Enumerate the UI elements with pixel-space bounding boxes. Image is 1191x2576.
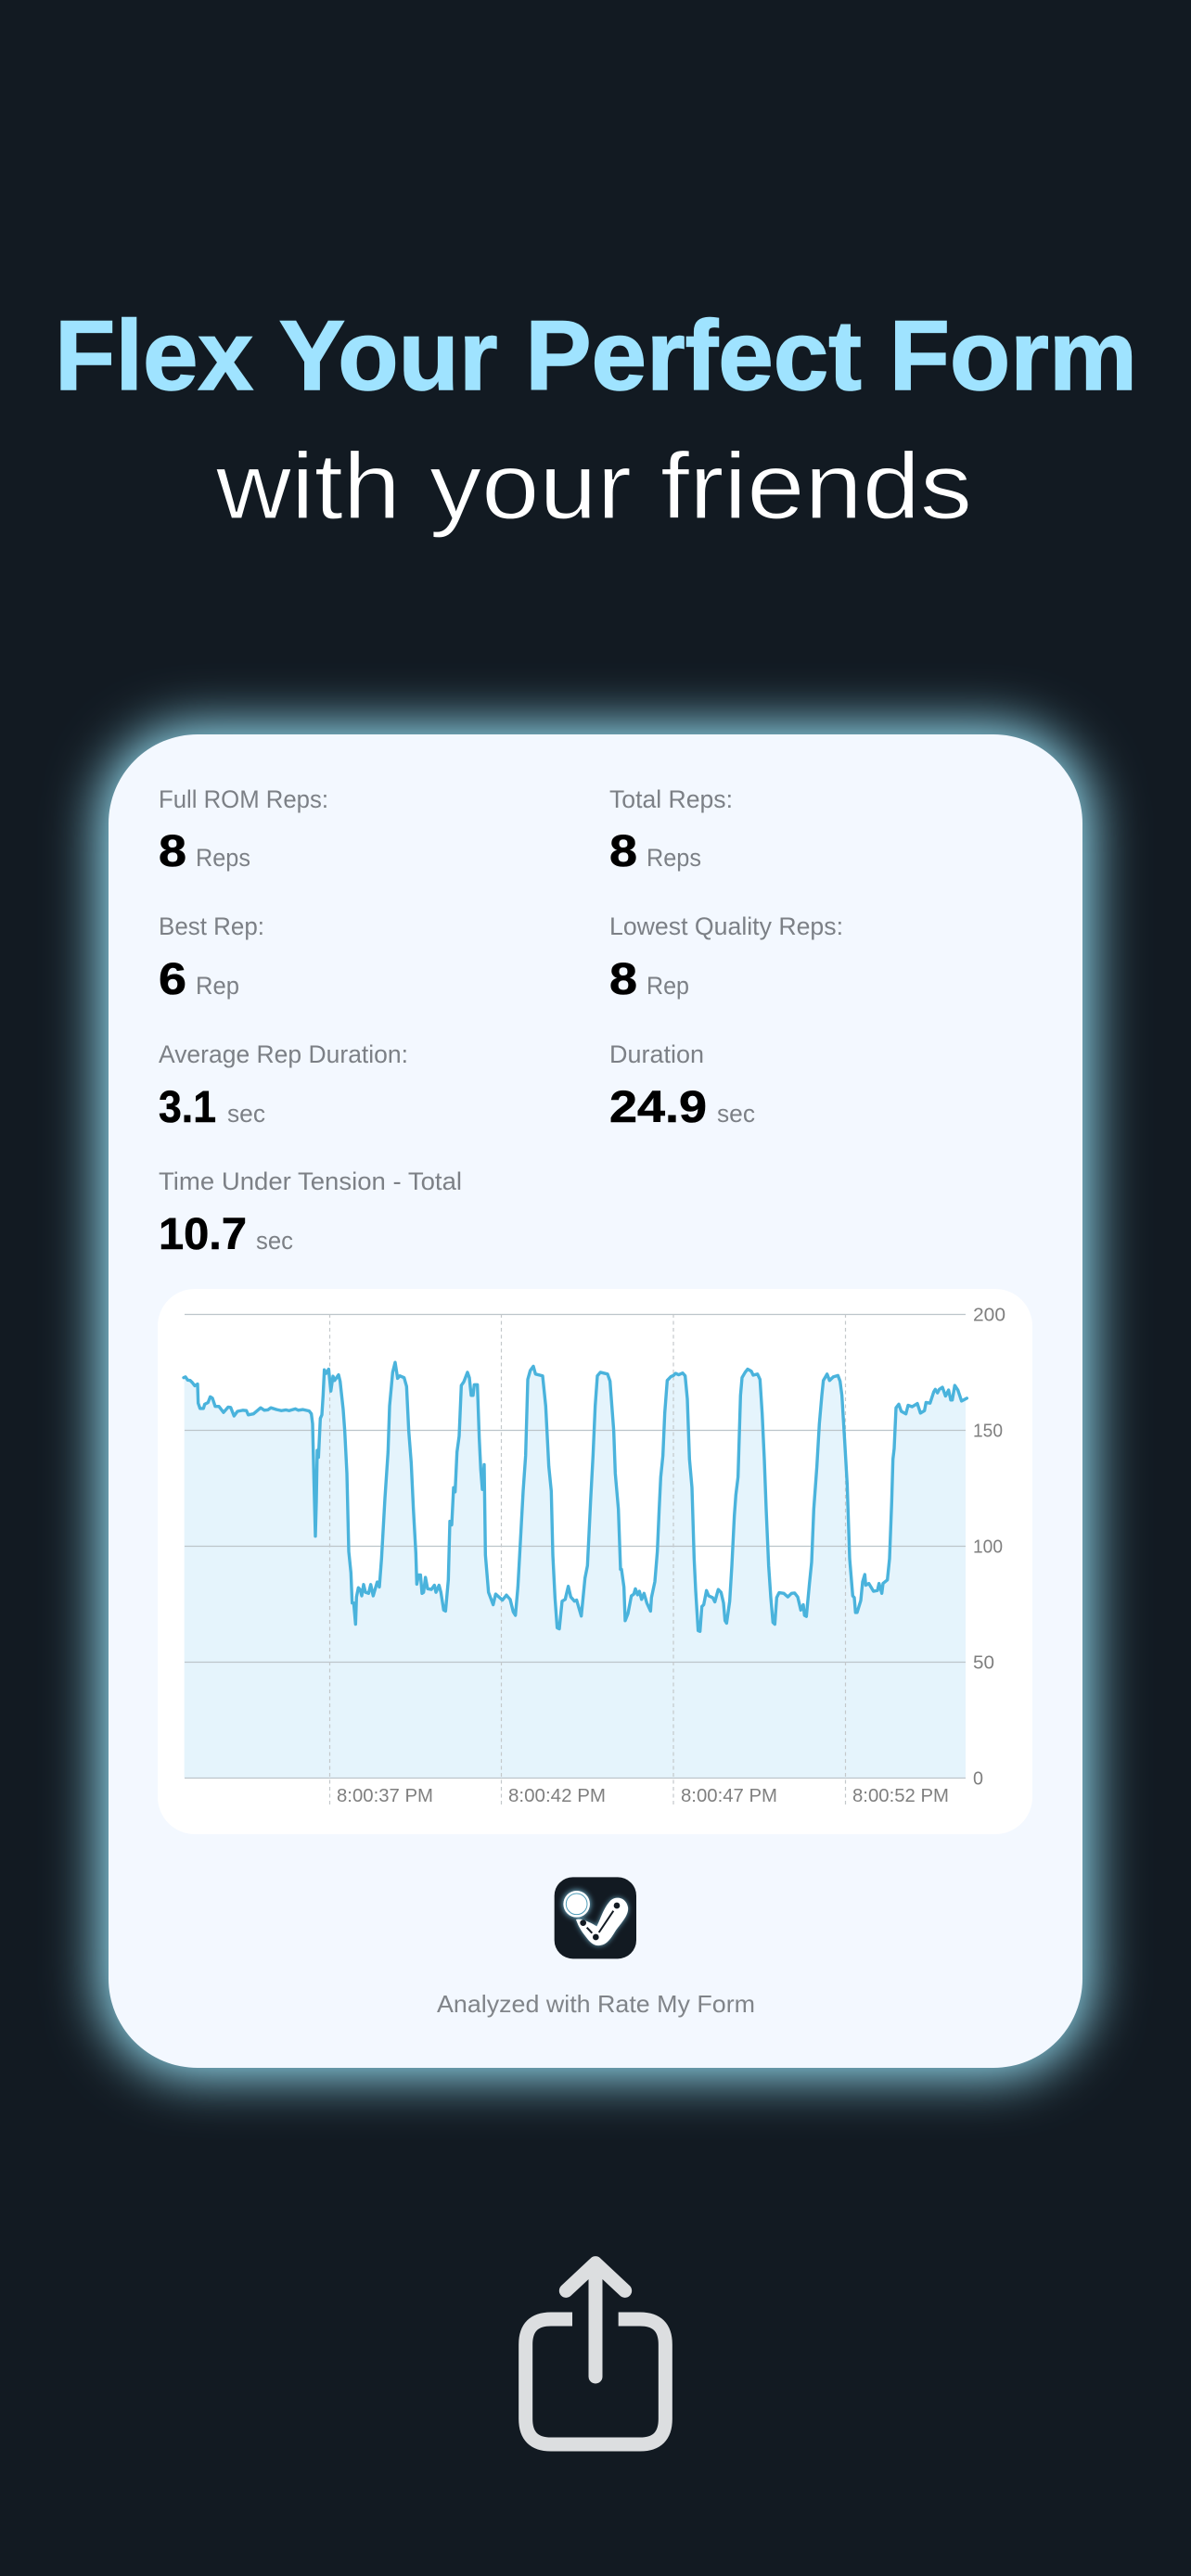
subtitle: with your friends: with your friends <box>215 435 972 539</box>
stat: Duration: Duration <box>609 1040 704 1068</box>
stat: Total Reps <box>609 785 733 876</box>
stat: Duration <box>609 1040 755 1132</box>
stat: Full ROM Reps <box>159 785 328 876</box>
stat: Total Reps: 8 <box>609 827 637 876</box>
stat: Full ROM Reps: 8 <box>159 827 186 876</box>
x axis time labels: 8:00:42 PM <box>508 1786 606 1806</box>
stat: Average Rep Duration: Average Rep Duration: <box>159 1040 408 1068</box>
stat: Full ROM Reps: Full ROM Reps: <box>159 785 328 813</box>
stat: Average Rep Duration: 3.1 <box>159 1083 216 1132</box>
glow behind card <box>101 727 1090 2075</box>
stat: Lowest Quality Reps: Rep <box>647 972 689 1000</box>
stat: Average Rep Duration <box>159 1040 408 1132</box>
x axis time labels: 8:00:37 PM <box>337 1786 433 1806</box>
stat: Best Rep: 6 <box>159 955 186 1004</box>
stat: Lowest Quality Reps: Lowest Quality Reps: <box>609 912 843 940</box>
y axis labels: 0 <box>973 1769 983 1790</box>
stat: Lowest Quality Reps: 8 <box>609 955 637 1004</box>
stat: Time Under Tension - Total: 10.7 <box>159 1210 247 1259</box>
icon: share arrow <box>526 2264 665 2444</box>
stat: Total Reps: Reps <box>647 844 701 872</box>
stat: Best Rep: Best Rep: <box>159 912 264 940</box>
y axis labels: 150 <box>973 1421 1003 1441</box>
stat: Best Rep: Rep <box>196 972 239 1000</box>
chart: rep angle over time <box>158 1289 1032 1834</box>
stat: Duration: sec <box>717 1100 755 1128</box>
stat: Best Rep <box>159 912 264 1004</box>
y axis labels: 200 <box>973 1306 1005 1326</box>
stat: Full ROM Reps: Reps <box>196 844 250 872</box>
chart area fill <box>185 1362 966 1778</box>
panel: results card <box>109 734 1082 2068</box>
x axis time labels: 8:00:52 PM <box>852 1786 949 1806</box>
stat: Time Under Tension - Total: sec <box>256 1227 293 1255</box>
stat: Time Under Tension - Total <box>159 1167 462 1259</box>
chart data line <box>184 1362 967 1631</box>
y axis labels: 50 <box>973 1652 994 1673</box>
title: Flex Your Perfect Form: Flex Your Perfect Form <box>55 300 1137 411</box>
y axis labels: 100 <box>973 1537 1003 1558</box>
x axis time labels <box>337 1786 949 1806</box>
y axis labels <box>973 1306 1005 1790</box>
stat: Lowest Quality Reps <box>609 912 843 1004</box>
stat: Average Rep Duration: sec <box>227 1100 265 1128</box>
caption: Analyzed with Rate My Form: Analyzed with Rate My Form <box>437 1990 755 2018</box>
icon: Rate My Form app logo <box>555 1877 636 1958</box>
stat: Total Reps: Total Reps: <box>609 785 733 813</box>
x axis time labels: 8:00:47 PM <box>681 1786 777 1806</box>
stat: Duration: 24.9 <box>609 1083 707 1132</box>
stat: Time Under Tension - Total: Time Under Tension - Total <box>159 1167 462 1195</box>
